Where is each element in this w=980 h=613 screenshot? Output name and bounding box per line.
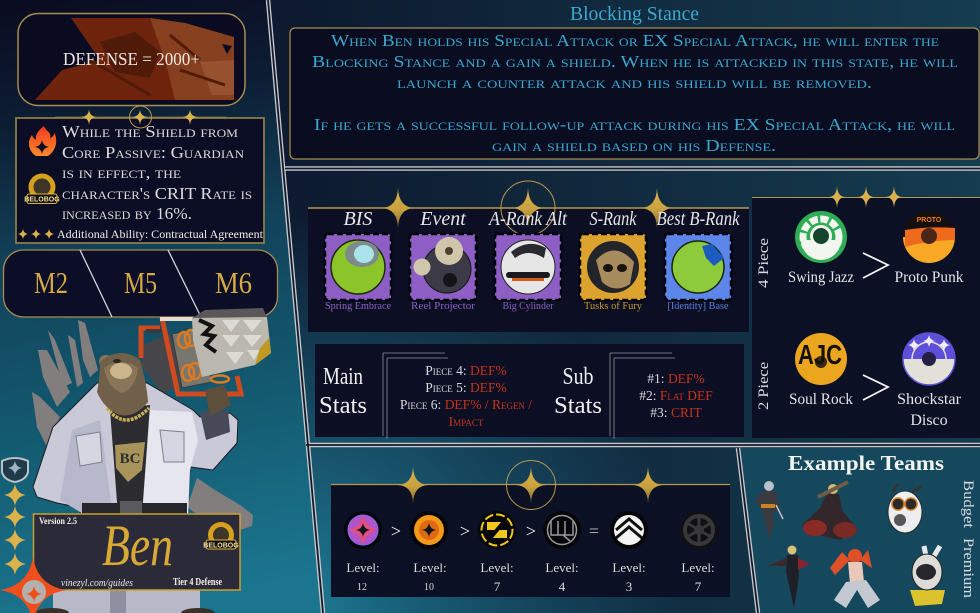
disc: Proto Punk: PROTO <box>917 217 942 224</box>
panel: drive disc sets <box>752 186 980 438</box>
bangboo: premium <box>910 546 945 606</box>
equals: = <box>589 521 599 541</box>
main stats list: Piece 5: DEF% <box>425 380 507 395</box>
main stats list: Impact <box>449 414 484 429</box>
corner ornaments <box>383 353 675 439</box>
sub stats list: #2: Flat DEF <box>639 388 713 403</box>
w-engine: Spring Embrace <box>325 208 391 312</box>
skill: assist <box>680 511 718 594</box>
panel: drive disc stats <box>315 344 744 439</box>
greater than: > <box>460 521 470 541</box>
w-engine: Tusks of Fury <box>580 208 646 312</box>
w-engine: Reel Projector: Event <box>419 208 466 230</box>
w-engine: Reel Projector: Reel Projector <box>411 301 476 312</box>
budget label: Budget <box>960 480 976 529</box>
panel: blocking stance description: Blocking Stance and a gain a shield. When he is attacked in this state, he will <box>312 52 958 71</box>
panel: blocking stance description: launch a counter attack and his shield will be removed. <box>397 73 872 92</box>
w-engine: Big Cylinder: A-Rank Alt <box>487 208 567 230</box>
disc: Soul Rock: AJC <box>798 339 842 370</box>
hammer <box>141 308 271 394</box>
panel: defense requirement <box>18 14 245 106</box>
disc: Proto Punk <box>894 211 964 286</box>
2 piece label: 2 Piece <box>756 362 772 410</box>
sub stats list: #3: CRIT <box>650 405 702 420</box>
sub stats list: #1: DEF% <box>647 371 705 386</box>
ability description: While the Shield from <box>62 122 238 141</box>
panel: mindscape tiers: M6 <box>215 265 252 300</box>
skill: core: 12 <box>357 582 367 593</box>
panel: mindscape tiers <box>4 250 278 317</box>
faction badge <box>203 522 239 550</box>
w-engine: Big Cylinder <box>487 208 567 312</box>
disc: Swing Jazz <box>788 211 854 286</box>
bangboo: budget <box>888 484 922 533</box>
skill: basic: Level: <box>545 560 579 575</box>
greater than: > <box>526 521 536 541</box>
skill: special: 10 <box>424 582 434 593</box>
w-engine: [Identity] Base: [Identity] Base <box>668 301 729 312</box>
panel dividers <box>268 0 980 613</box>
w-engine: [Identity] Base: Best B-Rank <box>656 208 740 230</box>
shirt: BC <box>120 451 140 467</box>
icon: belobog faction: BELOBOG <box>24 196 60 204</box>
panel: mindscape tiers: M2 <box>34 265 68 300</box>
main stats list: Piece 6: DEF% / Regen / <box>400 397 532 412</box>
panel: blocking stance description: If he gets a successful follow-up attack during his EX Special Attack, he will <box>314 115 955 134</box>
main stats heading: Stats <box>319 393 367 419</box>
title: Blocking Stance: Blocking Stance <box>570 3 699 25</box>
main stats list <box>400 363 532 429</box>
4 piece label: 4 Piece <box>756 238 772 288</box>
panel: example teams <box>755 451 976 608</box>
banner art <box>35 18 234 100</box>
disc: Shockstar Disco: Shockstar <box>897 391 962 408</box>
defense text: DEFENSE = 2000+ <box>63 49 200 69</box>
disc: Shockstar Disco <box>897 333 962 429</box>
w-engine: Reel Projector <box>410 208 476 312</box>
ability description <box>62 122 252 223</box>
rating stars <box>4 484 26 575</box>
disc: Swing Jazz: Swing Jazz <box>788 269 854 286</box>
sub stats list <box>639 371 713 420</box>
panel: blocking stance description: gain a shield based on his Defense. <box>492 136 776 155</box>
ability description: character's CRIT Rate is <box>62 184 252 203</box>
skill: core: Level: <box>346 560 380 575</box>
main stats list: Piece 4: DEF% <box>425 363 507 378</box>
panel: additional ability <box>16 106 264 243</box>
character: premium agent 1 <box>768 546 810 608</box>
skill: assist: 7 <box>695 579 702 594</box>
decorative stars <box>382 181 673 235</box>
tier label: Tier 4 Defense <box>173 577 222 588</box>
w-engine: [Identity] Base <box>656 208 740 312</box>
w-engine: Spring Embrace: Spring Embrace <box>325 301 391 312</box>
icon: belobog faction <box>24 174 60 204</box>
w-engine: Spring Embrace: BIS <box>344 208 372 230</box>
ability description: Core Passive: Guardian <box>62 143 244 162</box>
skill: dodge <box>610 511 648 594</box>
skill: special: Level: <box>413 560 447 575</box>
skill: core <box>344 511 382 593</box>
shirt <box>107 405 150 515</box>
version: Version 2.5 <box>39 517 77 527</box>
character: Ben <box>32 308 271 613</box>
decorative stars <box>55 106 226 128</box>
decorative stars <box>829 186 902 208</box>
decorative stars <box>398 460 663 510</box>
main stats heading: Main <box>323 364 363 390</box>
jacket <box>33 383 238 517</box>
skill: special <box>410 511 448 593</box>
panel: blocking stance description <box>290 28 979 159</box>
skill: assist: Level: <box>681 560 715 575</box>
jacket pockets <box>76 430 184 466</box>
character: budget agent 1 <box>755 481 783 540</box>
w-engine: Tusks of Fury: S-Rank <box>590 208 637 230</box>
premium label: Premium <box>960 538 976 598</box>
disc: Shockstar Disco: Disco <box>910 412 948 429</box>
belt <box>82 501 187 517</box>
ink splash <box>32 320 253 530</box>
skill: basic: 4 <box>559 579 566 594</box>
faction badge: BELOBOG <box>203 542 239 550</box>
sleeve and hand <box>200 385 231 440</box>
sub stats heading: Sub <box>562 364 594 390</box>
heading: Example Teams <box>788 451 944 475</box>
skill: chain: Level: <box>480 560 514 575</box>
character: premium agent 2 <box>830 549 880 608</box>
name plate <box>34 513 240 590</box>
greater than: > <box>391 521 401 541</box>
skill: dodge: 3 <box>626 579 632 594</box>
site url: vinezyl.com/guides <box>61 577 133 589</box>
icon: fire attribute <box>29 126 56 156</box>
additional ability name: Additional Ability: Contractual Agreement <box>57 229 264 241</box>
sub stats heading <box>554 364 602 419</box>
arrow: greater than <box>863 375 888 400</box>
w-engine: Tusks of Fury: Tusks of Fury <box>584 301 643 312</box>
skill: dodge: Level: <box>612 560 646 575</box>
disc: Proto Punk: Proto Punk <box>894 269 964 286</box>
ability description: is in effect, the <box>62 163 181 182</box>
character: budget agent 2 <box>802 482 858 540</box>
skill: chain <box>478 511 516 594</box>
panel: w-engines <box>308 181 749 332</box>
icon: defense specialty shield <box>2 458 28 482</box>
main stats heading <box>319 364 367 419</box>
character name: Ben <box>102 513 173 578</box>
arrow: greater than <box>863 253 888 278</box>
disc: Soul Rock: Soul Rock <box>789 391 853 408</box>
panel: blocking stance description: When Ben holds his Special Attack or EX Special Attack, he will enter the <box>331 31 939 50</box>
pants and shoes <box>35 585 215 613</box>
w-engine: Big Cylinder: Big Cylinder <box>502 301 554 312</box>
skill: chain: 7 <box>494 579 501 594</box>
panel: skill priority <box>331 460 730 597</box>
ability description: increased by 16%. <box>62 204 192 223</box>
panel: mindscape tiers: M5 <box>124 265 157 300</box>
skill: basic <box>543 511 581 594</box>
disc: Soul Rock <box>789 333 853 408</box>
bear head <box>97 353 148 415</box>
sub stats heading: Stats <box>554 393 602 419</box>
icon: orange star with attribute badge <box>0 557 66 613</box>
